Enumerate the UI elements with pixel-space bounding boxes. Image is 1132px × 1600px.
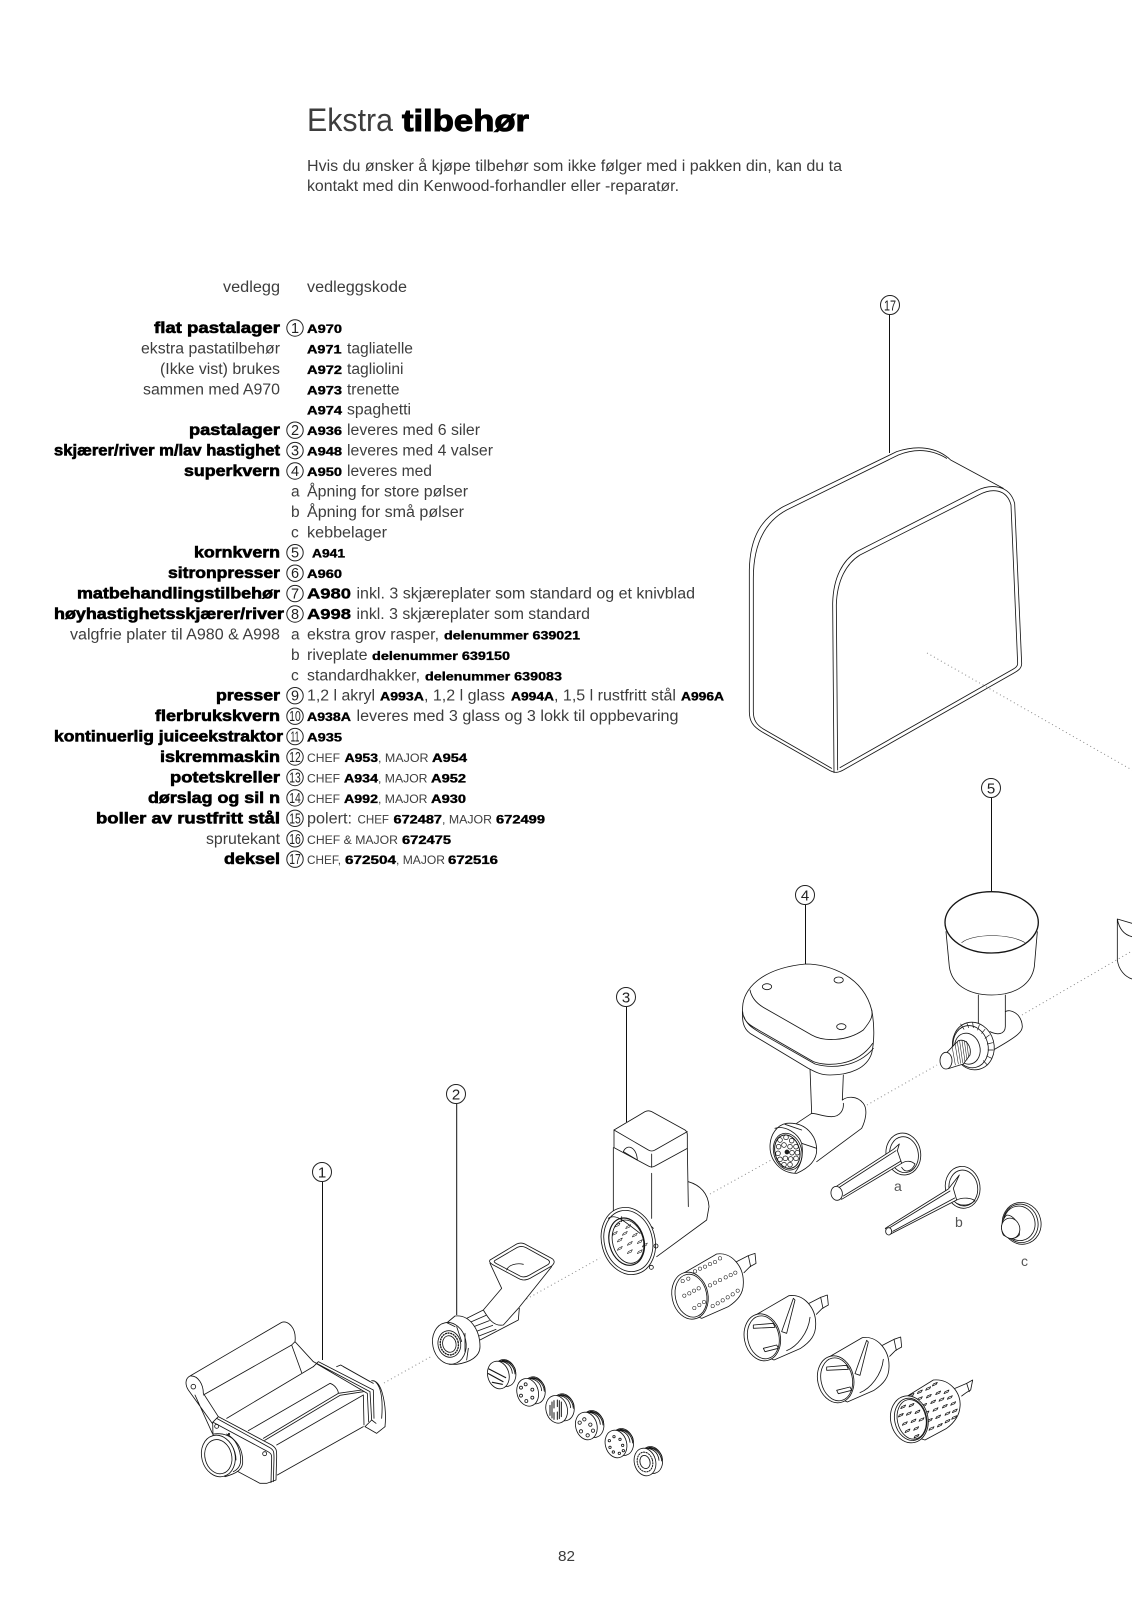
row A973: sammen med A970 [143,381,280,398]
row 8a: ekstra grov rasper, [307,626,439,644]
column headers [223,279,407,296]
page number: 82 [558,1549,575,1565]
row 15 boller av rustfritt stål: boller av rustfritt stål [96,810,280,827]
title: tilbehør [402,103,529,138]
row 8c: delenummer 639083 [425,671,562,683]
icon: pasta discs [484,1357,666,1478]
row 7 matbehandlingstilbehør: 7 [291,587,299,603]
row 4 superkvern: superkvern [184,463,280,480]
row 15 boller av rustfritt stål: 672499 [496,814,545,826]
row 10 flerbrukskvern [155,708,678,725]
row 8c: c [291,667,299,684]
label 5 with leader: 5 [987,780,995,798]
icon: pasta roller 1 [186,1322,385,1483]
row 5 kornkvern: kornkvern [194,545,280,562]
row 15 boller av rustfritt stål [96,810,545,827]
row 5 kornkvern: A941 [312,549,346,561]
row 17 deksel: 672504 [345,855,397,867]
column headers: vedleggskode [307,279,407,296]
row A973: trenette [347,381,400,398]
title [307,102,529,138]
row 13 potetskreller: 13 [289,770,301,786]
row 6 sitronpresser [168,565,342,582]
row 15 boller av rustfritt stål: 672487 [394,814,442,826]
row 14 dørslag og sil n: 14 [289,791,301,807]
label a: a [894,1178,902,1194]
icon: drum 1 fine [667,1253,756,1323]
row 8 høyhastighetsskjærer/river: inkl. 3 skjæreplater som standard [356,606,590,623]
row 9 presser: presser [216,688,280,705]
row A971 [141,340,413,357]
row 4b: Åpning for små pølser [307,504,464,521]
row 4 superkvern: A950 [307,467,342,479]
row 14 dørslag og sil n: , MAJOR [378,792,428,806]
row 15 boller av rustfritt stål: CHEF [358,812,389,826]
row 7 matbehandlingstilbehør: inkl. 3 skjæreplater som standard og et knivblad [356,586,695,603]
disc 4 holes [572,1408,607,1442]
row 12 iskremmaskin: 12 [289,750,301,766]
row 13 potetskreller: , MAJOR [378,772,428,786]
row 16 sprutekant: 672475 [402,835,452,847]
row 9 presser: 9 [291,689,299,705]
row 16 sprutekant [206,831,452,848]
row A974 [307,402,411,419]
row 8a [70,626,581,644]
row 1 flat pastalager [154,320,342,337]
row 14 dørslag og sil n: CHEF [307,792,340,806]
row 4c: kebbelager [307,524,387,541]
label b: b [955,1214,963,1230]
row 8b: riveplate [307,647,368,664]
row 13 potetskreller: potetskreller [170,770,280,786]
row 15 boller av rustfritt stål: 15 [289,811,301,827]
row A972: (Ikke vist) brukes [160,361,280,378]
row 8a: delenummer 639021 [444,630,581,642]
row 16 sprutekant: sprutekant [206,831,281,848]
intro text: kontakt med din Kenwood-forhandler eller -reparatør. [307,178,679,195]
row 1 flat pastalager: A970 [307,324,342,336]
row 10 flerbrukskvern: leveres med 3 glass og 3 lokk til oppbevaring [356,708,678,725]
row 10 flerbrukskvern: 10 [289,709,301,725]
row 11 kontinuerlig juiceekstraktor: 11 [290,730,300,746]
row 17 deksel: deksel [224,851,280,868]
row 8 høyhastighetsskjærer/river: A998 [307,606,351,623]
row A972 [160,361,404,378]
dotted assembly axis [384,653,1132,1383]
row 9 presser: A994A [511,692,554,704]
row 9 presser: , 1,5 l rustfritt stål [554,688,676,705]
row 14 dørslag og sil n: A930 [431,794,466,806]
row 11 kontinuerlig juiceekstraktor [54,728,343,746]
row 9 presser: 1,2 l akryl [307,688,375,705]
label 2 with leader: 2 [452,1086,460,1104]
row 15 boller av rustfritt stål: polert: [307,810,352,827]
row 12 iskremmaskin: CHEF [307,751,340,765]
icon: drum 3 slicing [813,1337,902,1406]
row 17 deksel: CHEF, [307,853,341,867]
row A971: A971 [307,344,342,356]
icon: cover 17 [749,448,1022,773]
row 4a: a [291,483,300,500]
row 12 iskremmaskin [160,749,468,766]
row 3 skjærer/river [54,442,493,460]
row 13 potetskreller: A934 [344,774,379,786]
row 17 deksel: 17 [289,852,301,868]
disc 1 slots [484,1357,519,1391]
label 3 with leader: 3 [622,990,630,1006]
row 3 skjærer/river: A948 [307,447,343,459]
icon: slicer 3 [594,1111,709,1281]
row 2 pastalager: A936 [307,426,342,438]
row 2 pastalager: leveres med 6 siler [347,422,480,439]
intro text [307,158,842,195]
row 4 superkvern [184,463,432,480]
disc 6 ring [631,1444,666,1478]
row 9 presser [216,688,724,705]
row 10 flerbrukskvern: flerbrukskvern [155,708,280,725]
row A973: A973 [307,385,342,397]
row 1 flat pastalager: 1 [291,321,299,337]
row 12 iskremmaskin: A954 [432,753,468,765]
disc 5 holes [602,1426,637,1460]
label 4 with leader: 4 [801,888,809,904]
row A974: A974 [307,406,343,418]
label 3 with leader [616,988,636,1122]
label 1 with leader [312,1162,332,1360]
column headers: vedlegg [223,279,280,296]
row 8c [291,667,562,684]
row A973 [143,381,400,398]
label 4 with leader [796,886,814,964]
row 8a: a [291,626,300,644]
row 3 skjærer/river: skjærer/river m/lav hastighet [54,443,280,460]
row 8b: delenummer 639150 [372,651,510,663]
row 7 matbehandlingstilbehør: A980 [307,586,351,603]
row A971: tagliatelle [347,340,413,357]
row 10 flerbrukskvern: A938A [307,712,351,724]
row 11 kontinuerlig juiceekstraktor: A935 [307,733,343,745]
row 5 kornkvern: 5 [291,546,299,562]
row 15 boller av rustfritt stål: , MAJOR [442,812,492,826]
row 13 potetskreller [170,769,466,786]
row A971: ekstra pastatilbehør [141,340,280,357]
row 3 skjærer/river: 3 [291,444,299,460]
label 1 with leader: 1 [318,1164,326,1182]
row 12 iskremmaskin: A953 [344,753,378,765]
row 12 iskremmaskin: iskremmaskin [160,749,280,766]
icon: sausage nozzle b [885,1164,983,1235]
row 8 høyhastighetsskjærer/river [54,606,590,623]
row 9 presser: A993A [380,692,424,704]
row 4 superkvern: leveres med [347,463,432,480]
label 17 with leader: 17 [884,298,896,314]
row 8c: standardhakker, [307,667,420,684]
row 4b: b [291,504,300,521]
row 4 superkvern: 4 [291,464,299,480]
row 4c: c [291,524,299,541]
icon: drum 2 slicing [740,1295,828,1364]
row 6 sitronpresser: 6 [291,566,299,582]
label 17 with leader [880,296,900,453]
row 2 pastalager [189,422,480,439]
row 8 høyhastighetsskjærer/river: høyhastighetsskjærer/river [54,606,284,623]
disc 3 hatched [543,1391,577,1426]
row 4a: Åpning for store pølser [307,483,468,500]
row 14 dørslag og sil n [148,790,466,807]
row 17 deksel: 672516 [448,855,498,867]
icon: mincer 4 [742,964,874,1173]
row 1 flat pastalager: flat pastalager [154,320,280,337]
row 5 kornkvern [194,544,346,562]
row 13 potetskreller: A952 [431,774,466,786]
row 2 pastalager: 2 [291,423,299,439]
row 16 sprutekant: CHEF & MAJOR [307,833,398,847]
row A972: A972 [307,365,342,377]
row 9 presser: , 1,2 l glass [424,688,505,705]
row 3 skjærer/river: leveres med 4 valser [347,443,493,460]
parts table [54,279,724,868]
row 17 deksel [224,851,498,868]
icon: kebbe former c [998,1199,1045,1248]
row 12 iskremmaskin: , MAJOR [378,751,429,765]
row 14 dørslag og sil n: A992 [344,794,378,806]
row A974: spaghetti [347,402,411,419]
row 16 sprutekant: 16 [289,832,301,848]
label c: c [1021,1253,1028,1269]
row 7 matbehandlingstilbehør: matbehandlingstilbehør [77,586,280,603]
row 11 kontinuerlig juiceekstraktor: kontinuerlig juiceekstraktor [54,729,283,746]
icon: drum 4 grater [886,1380,973,1446]
icon: grain mill 5 [940,892,1132,1075]
title: Ekstra [307,102,393,138]
row 14 dørslag og sil n: dørslag og sil n [148,790,280,807]
row 9 presser: A996A [681,692,724,704]
row 8b [291,647,510,664]
disc 2 holes [514,1374,548,1409]
label 5 with leader [982,778,1000,891]
row 13 potetskreller: CHEF [307,772,340,786]
row 17 deksel: , MAJOR [396,853,445,867]
row 8a: valgfrie plater til A980 & A998 [70,626,280,644]
icon: pasta hopper 2 [429,1243,554,1367]
label 2 with leader [446,1084,466,1315]
row A972: tagliolini [347,361,404,378]
row 2 pastalager: pastalager [189,422,280,439]
icon: sausage nozzle a [830,1131,923,1201]
row 8b: b [291,647,300,664]
row 6 sitronpresser: sitronpresser [168,565,280,582]
row 8 høyhastighetsskjærer/river: 8 [291,607,299,623]
intro text: Hvis du ønsker å kjøpe tilbehør som ikke følger med i pakken din, kan du ta [307,158,842,175]
row 6 sitronpresser: A960 [307,569,342,581]
row 7 matbehandlingstilbehør [77,585,695,603]
